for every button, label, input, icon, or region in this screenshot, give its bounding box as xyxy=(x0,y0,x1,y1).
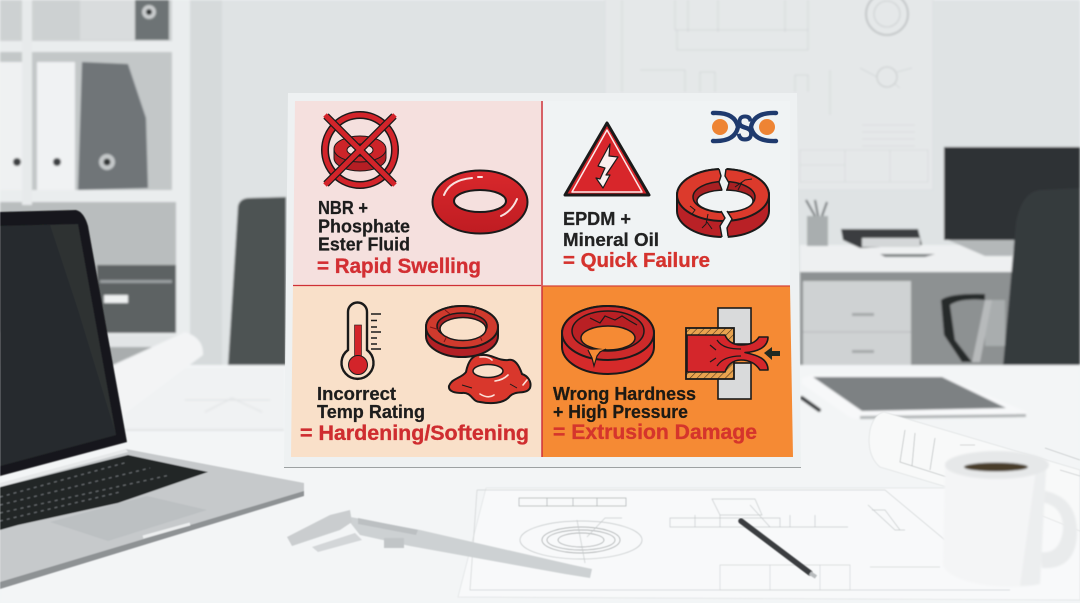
office chair left xyxy=(228,197,286,366)
text: Phosphate: Phosphate xyxy=(318,216,410,236)
text: Wrong Hardness: Wrong Hardness xyxy=(553,384,696,404)
desk right xyxy=(800,200,1080,366)
icon: warning triangle xyxy=(565,123,649,195)
office chair right xyxy=(941,188,1080,366)
icon: cracked ring xyxy=(677,165,769,240)
icon: thermometer xyxy=(342,302,381,379)
monitor xyxy=(944,147,1080,256)
text: = Quick Failure: = Quick Failure xyxy=(563,249,710,272)
drawing sheet on desk xyxy=(458,488,1080,600)
wall blueprint xyxy=(605,0,933,190)
poster board xyxy=(284,93,801,468)
rolled blueprint right xyxy=(869,412,1080,531)
caliper xyxy=(287,510,592,578)
logo: DSC xyxy=(712,108,776,150)
panel: wrong hardness + high pressure xyxy=(542,286,793,457)
rolled plan on desk left xyxy=(113,332,284,430)
text: = Rapid Swelling: = Rapid Swelling xyxy=(317,254,481,278)
bookshelf xyxy=(0,0,190,366)
icon: extrusion diagram xyxy=(686,308,780,399)
text: = Hardening/Softening: = Hardening/Softening xyxy=(300,421,529,445)
icon: softened melted ring xyxy=(449,355,531,403)
icon: hardened ring xyxy=(426,306,498,357)
panel: NBR + phosphate ester fluid xyxy=(293,101,541,285)
tablet xyxy=(802,375,1027,419)
coffee mug xyxy=(943,451,1077,587)
text: + High Pressure: + High Pressure xyxy=(553,402,688,422)
text: Ester Fluid: Ester Fluid xyxy=(318,234,410,254)
panel: EPDM + mineral oil xyxy=(543,101,790,286)
icon: swollen O-ring xyxy=(432,170,528,234)
panel: incorrect temp rating xyxy=(291,286,541,457)
text: NBR +: NBR + xyxy=(318,197,368,218)
logo: DSC: S xyxy=(736,108,754,150)
text: Mineral Oil: Mineral Oil xyxy=(563,229,659,250)
pen xyxy=(741,521,816,577)
icon: damaged ring xyxy=(562,306,654,374)
text: = Extrusion Damage: = Extrusion Damage xyxy=(553,420,757,444)
desk surface xyxy=(0,365,1080,603)
arrow: pressure direction xyxy=(764,347,780,360)
text: Temp Rating: Temp Rating xyxy=(317,402,425,422)
laptop xyxy=(0,210,304,589)
text: EPDM +: EPDM + xyxy=(563,208,631,229)
icon: crossed-out seal xyxy=(325,115,395,185)
text: Incorrect: Incorrect xyxy=(317,384,396,404)
